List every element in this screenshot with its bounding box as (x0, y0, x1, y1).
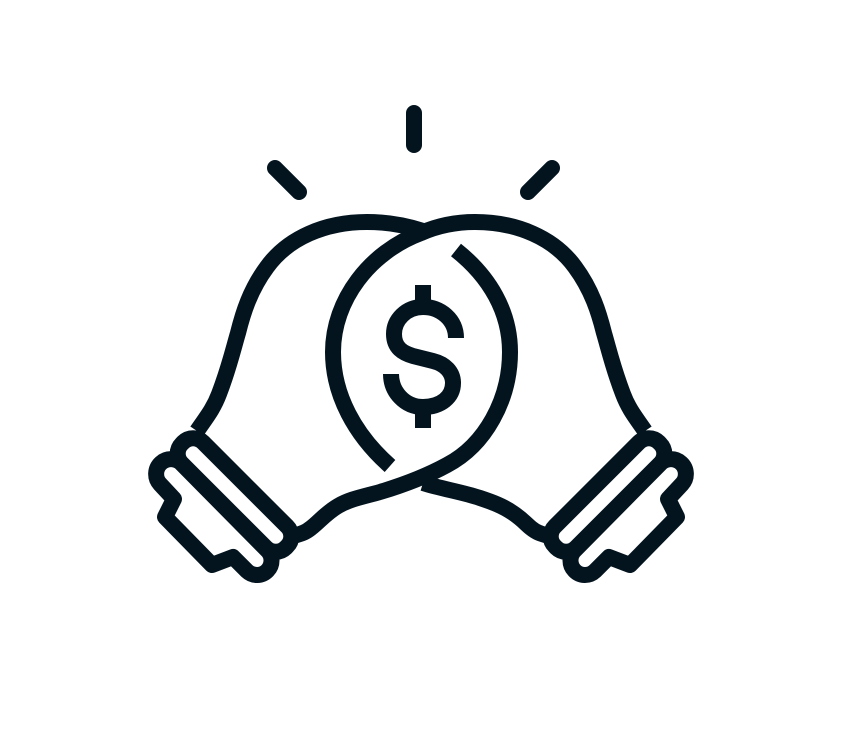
icon: left bulb glass (197, 222, 510, 537)
icon: right bulb glass (333, 222, 645, 537)
icon: left bulb base (156, 432, 297, 575)
icon: dollar sign (391, 285, 456, 428)
icon: light rays (275, 113, 552, 192)
icon: right bulb base (545, 432, 686, 575)
